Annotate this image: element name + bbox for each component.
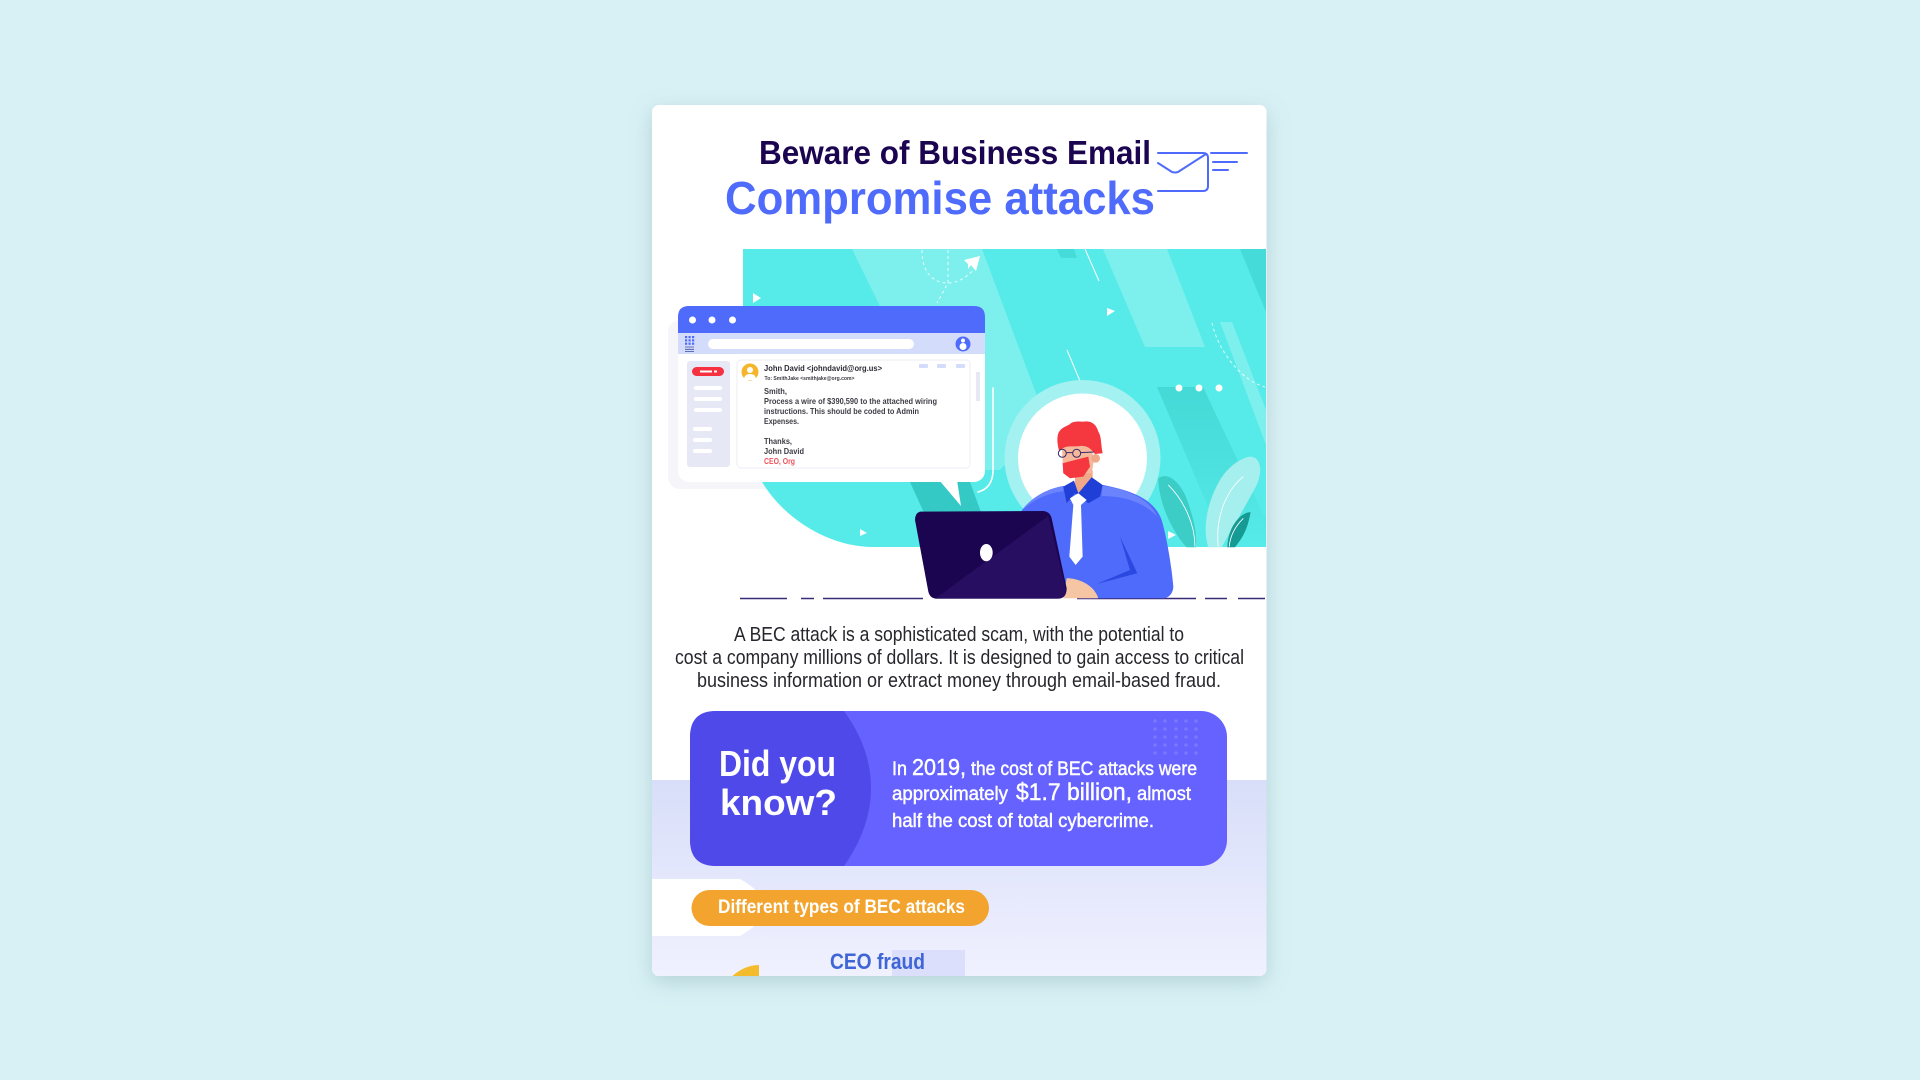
decorative triangles <box>753 293 1176 539</box>
white curved line near window <box>978 388 993 492</box>
panel left section <box>690 711 871 866</box>
white tab behind pill <box>652 879 768 936</box>
highlight behind CEO fraud <box>892 950 965 976</box>
statistic text: $1.7 billion, <box>1016 779 1132 806</box>
email text: CEO, Org <box>764 456 795 466</box>
sidebar <box>687 361 730 467</box>
infographic page <box>644 103 1274 990</box>
statistic text: approximately <box>892 784 1008 805</box>
window title bar <box>678 306 985 333</box>
intro paragraph: A BEC attack is a sophisticated scam, with the potential to <box>734 624 1184 646</box>
email text: Thanks, <box>764 436 792 446</box>
toolbar <box>678 333 985 354</box>
icon: paper plane <box>964 256 980 271</box>
statistic text <box>892 754 1197 832</box>
heading: did you know: Did you <box>719 743 836 784</box>
statistic text: In <box>892 759 907 780</box>
heading: did you know: know? <box>720 782 837 823</box>
speech bubble tail <box>939 480 961 506</box>
window control dots <box>689 316 736 324</box>
email text: John David <johndavid@org.us> <box>764 363 882 373</box>
heading: CEO fraud: CEO fraud <box>830 949 925 974</box>
email text <box>764 363 937 466</box>
intro paragraph: cost a company millions of dollars. It is designed to gain access to critical <box>675 647 1244 669</box>
message panel <box>737 360 970 468</box>
dot pattern <box>1153 719 1198 755</box>
scrollbar <box>976 372 980 401</box>
plants <box>1158 457 1260 547</box>
three dots <box>1176 384 1222 392</box>
laptop <box>915 511 1067 599</box>
email text: To: SmithJake <smithjake@org.com> <box>764 376 854 382</box>
title: Beware of Business Email <box>759 134 1151 171</box>
title <box>725 134 1155 224</box>
email text: Smith, <box>764 386 787 396</box>
statistic text: 2019, <box>912 754 966 780</box>
heading: did you know <box>719 743 837 823</box>
email window shadow <box>668 320 868 489</box>
section pill: different types: Different types of BEC attacks <box>718 896 965 918</box>
illustration: teal background with stripes <box>743 249 1266 547</box>
tab markers <box>919 364 965 368</box>
email text: instructions. This should be coded to Admin <box>764 406 919 416</box>
icon: flying envelope <box>1158 153 1247 191</box>
statistic text: the cost of BEC attacks were <box>971 759 1197 780</box>
email text: Expenses. <box>764 416 799 426</box>
card background <box>652 105 1266 976</box>
ground lines <box>740 598 1265 600</box>
statistic text: half the cost of total cybercrime. <box>892 811 1154 832</box>
title: Compromise attacks <box>725 172 1155 224</box>
icon: yellow circle <box>732 965 759 976</box>
statistic text: almost <box>1137 784 1192 805</box>
email text: John David <box>764 446 804 456</box>
panel: did you know <box>690 711 1227 866</box>
lavender lower background <box>652 780 1266 976</box>
email window <box>678 306 985 482</box>
person with red hair <box>1022 421 1173 598</box>
email text: Process a wire of $390,590 to the attached wiring <box>764 396 937 406</box>
intro paragraph: business information or extract money through email-based fraud. <box>697 670 1221 692</box>
intro paragraph <box>675 624 1244 692</box>
white circle behind person <box>1004 380 1160 536</box>
sender avatar <box>742 364 758 380</box>
section pill: different types <box>692 890 989 926</box>
